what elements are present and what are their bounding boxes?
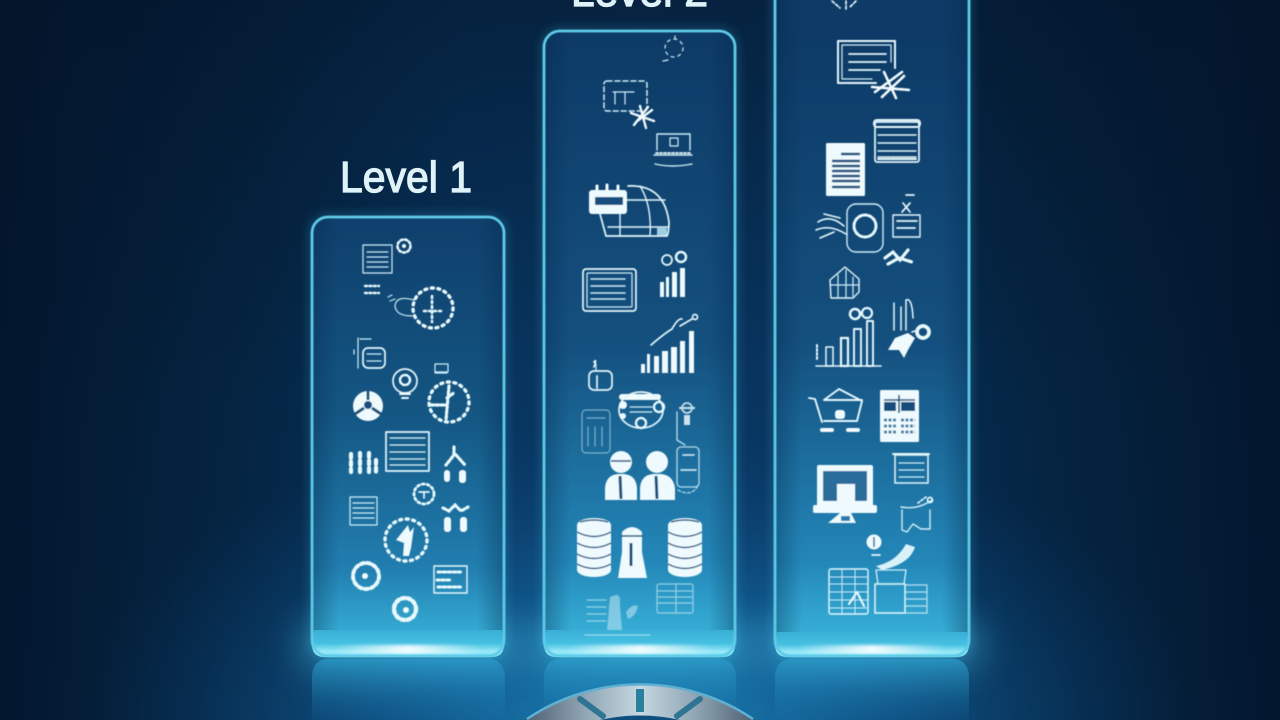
icon: branching forks 2 xyxy=(443,505,468,532)
reflection: level 1 xyxy=(312,659,505,720)
reflection: level 3 xyxy=(775,659,969,720)
icon: document xyxy=(363,245,392,273)
icons: level 3 xyxy=(809,1,932,614)
icon: small dotted badge xyxy=(414,484,434,504)
icon: bar chart with badges xyxy=(816,308,881,366)
icon: hand xyxy=(816,214,846,238)
icon: faint spark xyxy=(663,36,683,61)
icon: laptop xyxy=(654,134,692,166)
icon: open box xyxy=(875,570,906,613)
reflection: level 2 xyxy=(544,659,736,720)
icon: robot console xyxy=(619,392,664,428)
icon: house xyxy=(830,267,859,298)
icon: database right xyxy=(668,518,702,577)
icon: faint table xyxy=(657,584,693,613)
icon: device tower xyxy=(677,403,699,493)
icon: blind table xyxy=(874,120,920,162)
icon: swoosh xyxy=(872,544,915,570)
icon: dashed frame xyxy=(604,81,647,111)
dial tick: centre xyxy=(636,689,644,712)
icon: small label xyxy=(435,364,448,373)
icon: chain xyxy=(365,286,379,293)
icon: network xyxy=(885,250,912,264)
icon: lined sheet xyxy=(386,432,429,471)
icon: small disc xyxy=(866,534,882,550)
icon: bulb xyxy=(393,369,417,398)
panel: level 1 column xyxy=(304,217,512,720)
icon: picture box xyxy=(434,566,467,593)
icon: filled report xyxy=(880,390,919,442)
icon: bottom dotted ring xyxy=(394,598,416,620)
icon: people group xyxy=(351,453,376,472)
icon: small bar chart xyxy=(660,252,686,297)
icon: curved chart xyxy=(901,497,932,532)
icon: dotted target xyxy=(388,288,453,328)
icon: filled checklist xyxy=(826,143,865,196)
icon: round document xyxy=(847,204,883,252)
dial tick: left xyxy=(580,699,603,716)
icon: two people xyxy=(605,451,675,500)
icon: dome xyxy=(589,185,669,236)
icon: snowflake xyxy=(631,106,654,128)
panel: level 3 column xyxy=(767,0,977,720)
dial: gauge at bottom xyxy=(525,684,755,720)
icon: database left xyxy=(577,518,611,577)
icon: top snowflake xyxy=(832,1,856,10)
icon: table with chart xyxy=(829,569,868,614)
icon: small sheet xyxy=(350,497,377,525)
icon: growth chart xyxy=(641,314,698,373)
icon: person xyxy=(618,527,647,578)
dial tick: right xyxy=(677,699,700,716)
icon: monitor xyxy=(813,465,877,523)
icon: basket xyxy=(809,389,862,430)
icon: recycle disc xyxy=(353,391,383,421)
icon: faint document xyxy=(582,410,610,453)
icon: small badge xyxy=(398,240,410,252)
panel: level 2 column xyxy=(536,31,744,720)
icon: tablet with lines xyxy=(838,41,895,83)
icon: tool card xyxy=(354,338,385,368)
icon: side table xyxy=(905,585,927,613)
icon: dotted dial xyxy=(429,382,469,422)
icon: tablet xyxy=(583,269,636,311)
icon: branching forks xyxy=(444,447,466,483)
icon: snowflake xyxy=(872,72,910,98)
icons: level 1 xyxy=(350,240,469,620)
icon: lined cabinet xyxy=(893,454,929,483)
icon: tubes and glove xyxy=(888,300,929,358)
icon: dotted ring xyxy=(353,563,379,589)
icon: box with tools xyxy=(893,195,920,237)
icon: large dotted bolt xyxy=(385,519,427,561)
icon: faint figure with sheet xyxy=(585,595,650,635)
icon: small tag xyxy=(589,361,612,390)
heading: Level 1: Level 1 xyxy=(340,153,472,202)
icons: level 2 xyxy=(577,36,702,635)
